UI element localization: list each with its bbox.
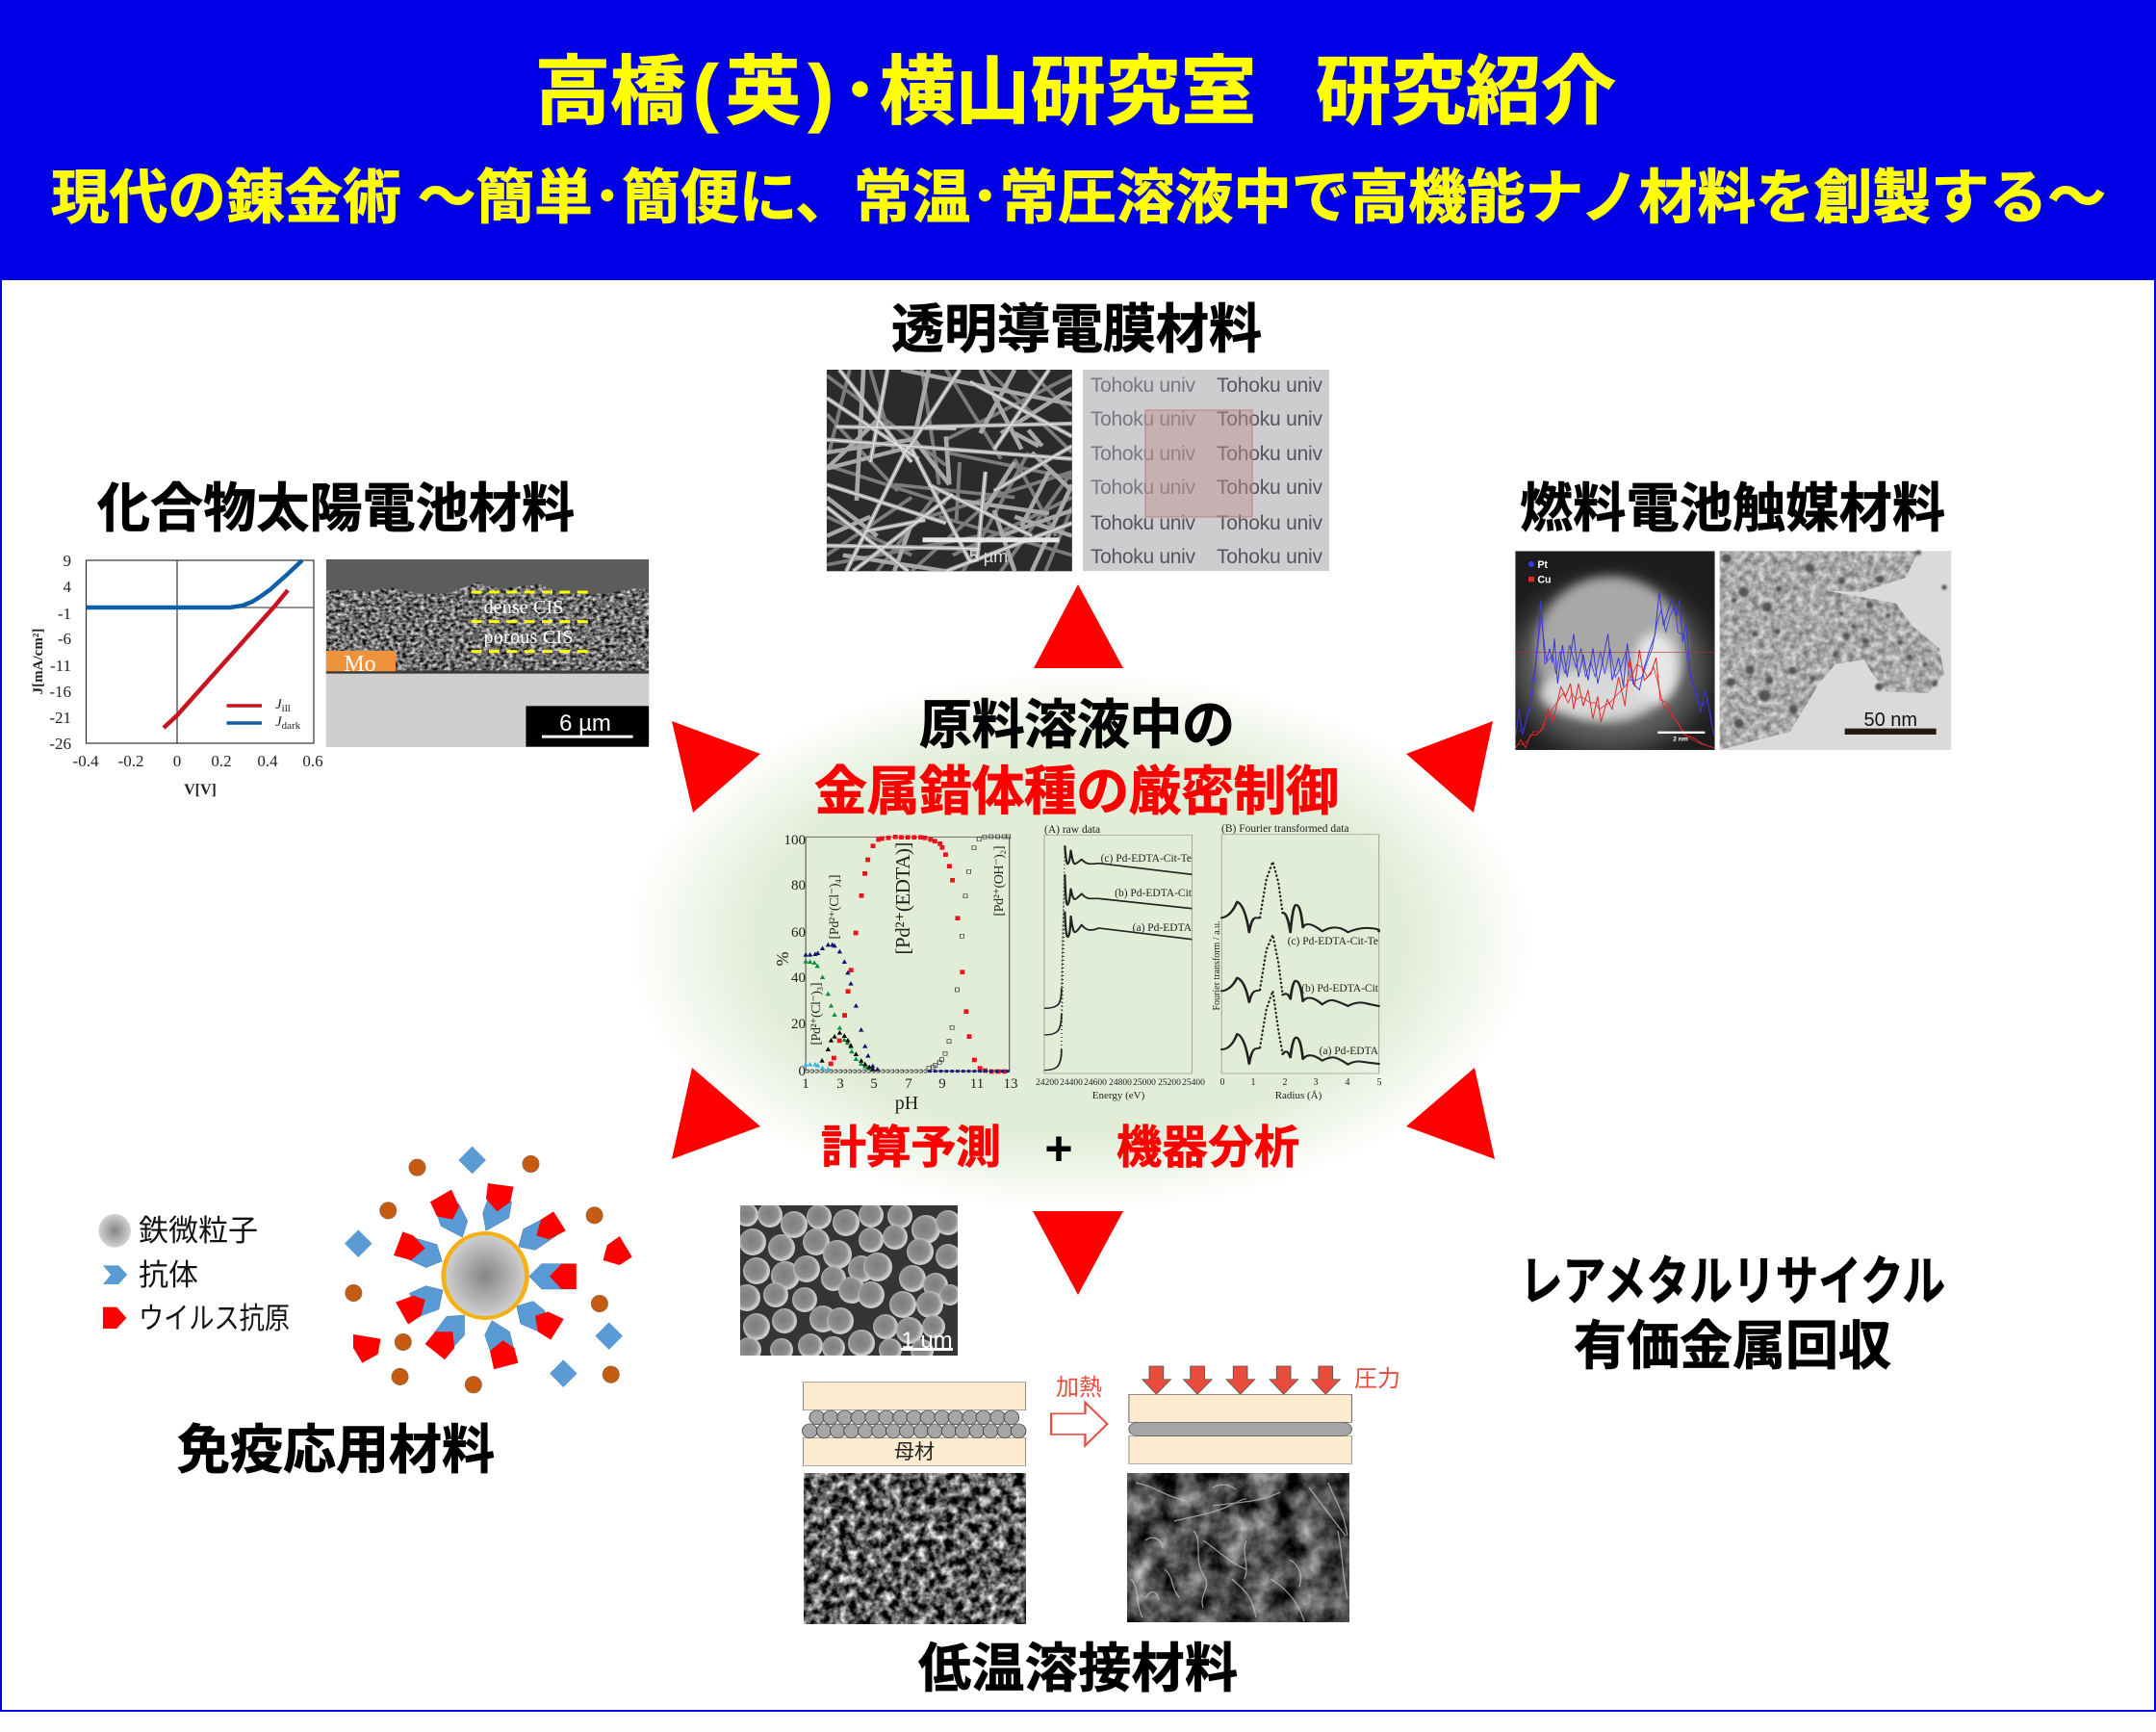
heading line 2: 有価金属回収: [1574, 1316, 1891, 1376]
speciation chart: 100: [783, 833, 806, 848]
HAADF particle image with line profile: 2 nm: [1673, 736, 1688, 742]
J-V chart: 9: [64, 552, 71, 570]
diagram: after heating under pressure: 圧力: [1354, 1366, 1400, 1392]
J-V chart: J: [275, 697, 282, 712]
heading line 1: レアメタルリサイクル: [1520, 1252, 1945, 1311]
legend: 抗体: [139, 1258, 198, 1292]
subtitle: 現代の錬金術 ～簡単･簡便に、常温･常圧溶液中で高機能ナノ材料を創製する～: [51, 165, 2106, 230]
XANES chart (A) raw data: 25200: [1158, 1078, 1181, 1088]
plus sign: +: [1044, 1122, 1073, 1176]
EXAFS chart (B) Fourier transformed data: 4: [1346, 1077, 1349, 1088]
EXAFS chart (B) Fourier transformed data: (a) Pd-EDTA: [1320, 1046, 1379, 1057]
SEM cross-section image: 6 µm: [559, 711, 611, 737]
EXAFS chart (B) Fourier transformed data: 0: [1220, 1077, 1224, 1088]
photo: film on printed text: Tohoku univ: [1091, 546, 1195, 568]
J-V chart: -16: [49, 683, 71, 701]
label: calculation prediction: 計算予測: [821, 1122, 1001, 1173]
XANES chart (A) raw data: 24600: [1084, 1078, 1107, 1088]
J-V chart: dark: [282, 720, 301, 732]
HAADF particle image with line profile: [1514, 551, 1715, 751]
photo: film on printed text: Tohoku univ: [1091, 512, 1195, 534]
J-V chart: 4: [64, 578, 71, 596]
J-V chart: ill: [282, 703, 291, 714]
diagram: before heating: 母材: [894, 1441, 935, 1463]
diagram: before heating: [803, 1383, 1026, 1465]
SEM cross-section image: dense CIS: [483, 597, 564, 618]
J-V chart: 0.2: [211, 752, 232, 770]
legend: [98, 1214, 290, 1335]
heading black: 原料溶液中の: [919, 695, 1235, 755]
speciation chart: [Pd²⁺(Cl⁻)₃]: [809, 982, 824, 1046]
photo: film on printed text: Tohoku univ: [1217, 546, 1322, 568]
legend: 鉄微粒子: [139, 1214, 258, 1248]
arrow: heating: [1051, 1375, 1107, 1446]
J-V chart: -6: [58, 630, 71, 648]
arrow triangles around the centre: [672, 584, 1495, 1295]
J-V chart: -1: [58, 605, 71, 623]
XANES chart (A) raw data: 25000: [1133, 1078, 1156, 1088]
EXAFS chart (B) Fourier transformed data: 5: [1376, 1077, 1382, 1088]
J-V chart: J[mA/cm²]: [31, 629, 46, 694]
XANES chart (A) raw data: (c) Pd-EDTA-Cit-Te: [1101, 853, 1192, 865]
panel: compound solar cell: [31, 478, 649, 798]
panel: transparent conductive film: [827, 299, 1329, 571]
main title: 高橋: [535, 49, 685, 134]
speciation chart: 80: [791, 878, 806, 893]
photo: film on printed text: Tohoku univ: [1091, 408, 1195, 430]
panel: immunological materials: [98, 1147, 632, 1480]
HAADF particle image with line profile: Pt: [1537, 559, 1548, 571]
SEM cross-section image: [326, 559, 649, 747]
speciation chart: 13: [1003, 1076, 1018, 1092]
J-V chart: -21: [49, 709, 71, 727]
speciation chart: [Pd²⁺(Cl⁻)₄]: [828, 874, 842, 940]
XANES chart (A) raw data: (a) Pd-EDTA: [1133, 922, 1193, 934]
SEM image: particles: [740, 1205, 958, 1356]
J-V chart: 0.4: [257, 752, 278, 770]
J-V chart: [31, 552, 323, 798]
XANES chart (A) raw data: (b) Pd-EDTA-Cit: [1115, 888, 1193, 899]
speciation chart: %: [773, 951, 792, 967]
EXAFS chart (B) Fourier transformed data: [1212, 823, 1382, 1101]
central glow ellipse: [628, 672, 1532, 1211]
arrow: lower left: [672, 1068, 760, 1159]
photo: film on printed text: [1083, 370, 1329, 571]
J-V chart: -0.4: [73, 752, 99, 770]
SEM image: after: [1127, 1473, 1349, 1622]
XANES chart (A) raw data: (A) raw data: [1044, 824, 1100, 836]
J-V chart: 0.6: [302, 752, 323, 770]
speciation chart: 5: [870, 1076, 878, 1092]
SEM image: before: [804, 1473, 1026, 1624]
SEM nanowires image: [827, 370, 1072, 571]
J-V chart: J: [275, 714, 282, 730]
panel: central metal complex control: [773, 695, 1382, 1176]
heading: 燃料電池触媒材料: [1520, 478, 1945, 538]
XANES chart (A) raw data: 24800: [1109, 1078, 1132, 1088]
main title: [535, 49, 1616, 134]
EXAFS chart (B) Fourier transformed data: 2: [1282, 1077, 1288, 1088]
EXAFS chart (B) Fourier transformed data: (b) Pd-EDTA-Cit: [1301, 983, 1379, 995]
speciation chart: pH: [895, 1093, 918, 1114]
J-V chart: 0: [173, 752, 181, 770]
arrow: upper left: [672, 721, 760, 813]
EXAFS chart (B) Fourier transformed data: Radius (Å): [1275, 1090, 1322, 1101]
photo: film on printed text: Tohoku univ: [1217, 408, 1322, 430]
panel: fuel cell catalysts: [1514, 478, 1951, 751]
speciation chart: 3: [836, 1076, 844, 1092]
diagram: iron particle with antibodies and antigens: [345, 1147, 632, 1393]
photo: film on printed text: Tohoku univ: [1217, 512, 1322, 534]
speciation chart: 9: [938, 1076, 946, 1092]
speciation chart: 7: [905, 1076, 912, 1092]
TEM image: [1720, 550, 1951, 750]
photo: film on printed text: Tohoku univ: [1217, 443, 1322, 465]
arrow: lower right: [1406, 1068, 1495, 1159]
speciation chart: 1: [802, 1076, 809, 1092]
XANES chart (A) raw data: 24200: [1036, 1078, 1059, 1088]
XANES chart (A) raw data: 25400: [1182, 1078, 1205, 1088]
photo: film on printed text: Tohoku univ: [1217, 375, 1322, 397]
HAADF particle image with line profile: Cu: [1537, 575, 1552, 586]
main title: (英)･: [693, 49, 879, 134]
header band: [0, 0, 2156, 280]
photo: film on printed text: Tohoku univ: [1091, 477, 1195, 499]
J-V chart: -26: [49, 735, 71, 753]
photo: film on printed text: Tohoku univ: [1217, 477, 1322, 499]
scale label: 5 µm: [969, 547, 1008, 566]
SEM cross-section image: Mo: [344, 652, 376, 677]
heading: 透明導電膜材料: [891, 299, 1262, 359]
speciation chart: [Pd²⁺(OH⁻)₂]: [992, 845, 1007, 917]
SEM image: particles: 1 um: [901, 1328, 953, 1354]
XANES chart (A) raw data: Energy (eV): [1092, 1090, 1145, 1101]
EXAFS chart (B) Fourier transformed data: Fourier transform / a.u.: [1212, 920, 1222, 1011]
XANES chart (A) raw data: [1036, 824, 1205, 1101]
speciation chart: 20: [791, 1017, 806, 1032]
heading: 化合物太陽電池材料: [97, 478, 575, 538]
photo: film on printed text: Tohoku univ: [1091, 443, 1195, 465]
arrow: down: [1033, 1211, 1123, 1295]
speciation chart: 0: [799, 1064, 806, 1079]
J-V chart: -0.2: [118, 752, 143, 770]
arrow: up: [1034, 584, 1123, 668]
main title: 研究紹介: [1316, 49, 1616, 134]
EXAFS chart (B) Fourier transformed data: (c) Pd-EDTA-Cit-Te: [1288, 936, 1378, 947]
speciation chart: [773, 833, 1018, 1114]
heading: 低温溶接材料: [918, 1639, 1238, 1698]
SEM cross-section image: porous CIS: [483, 627, 574, 648]
main title: 横山研究室: [880, 49, 1256, 134]
speciation chart: [Pd²⁺(EDTA)]: [891, 841, 914, 955]
EXAFS chart (B) Fourier transformed data: 3: [1313, 1077, 1319, 1088]
arrow: heating: 加熱: [1056, 1375, 1102, 1401]
label: instrument analysis: 機器分析: [1116, 1122, 1299, 1173]
EXAFS chart (B) Fourier transformed data: 1: [1251, 1077, 1255, 1088]
legend: ウイルス抗原: [139, 1302, 290, 1335]
J-V chart: -11: [50, 657, 71, 675]
heading red: 金属錯体種の厳密制御: [814, 762, 1339, 821]
J-V chart: V[V]: [184, 782, 217, 798]
diagram: after heating under pressure: [1129, 1366, 1400, 1463]
speciation chart: 60: [791, 925, 806, 941]
speciation chart: 40: [791, 970, 806, 986]
TEM image: 50 nm: [1864, 710, 1917, 731]
arrow: upper right: [1406, 721, 1493, 813]
heading: 免疫応用材料: [177, 1420, 495, 1480]
speciation chart: 11: [970, 1076, 984, 1092]
EXAFS chart (B) Fourier transformed data: (B) Fourier transformed data: [1221, 823, 1349, 835]
panel: rare metal recycling (heading): [1520, 1252, 1945, 1376]
photo: film on printed text: Tohoku univ: [1091, 375, 1195, 397]
panel: low temperature welding: [733, 1202, 1400, 1698]
XANES chart (A) raw data: 24400: [1060, 1078, 1083, 1088]
